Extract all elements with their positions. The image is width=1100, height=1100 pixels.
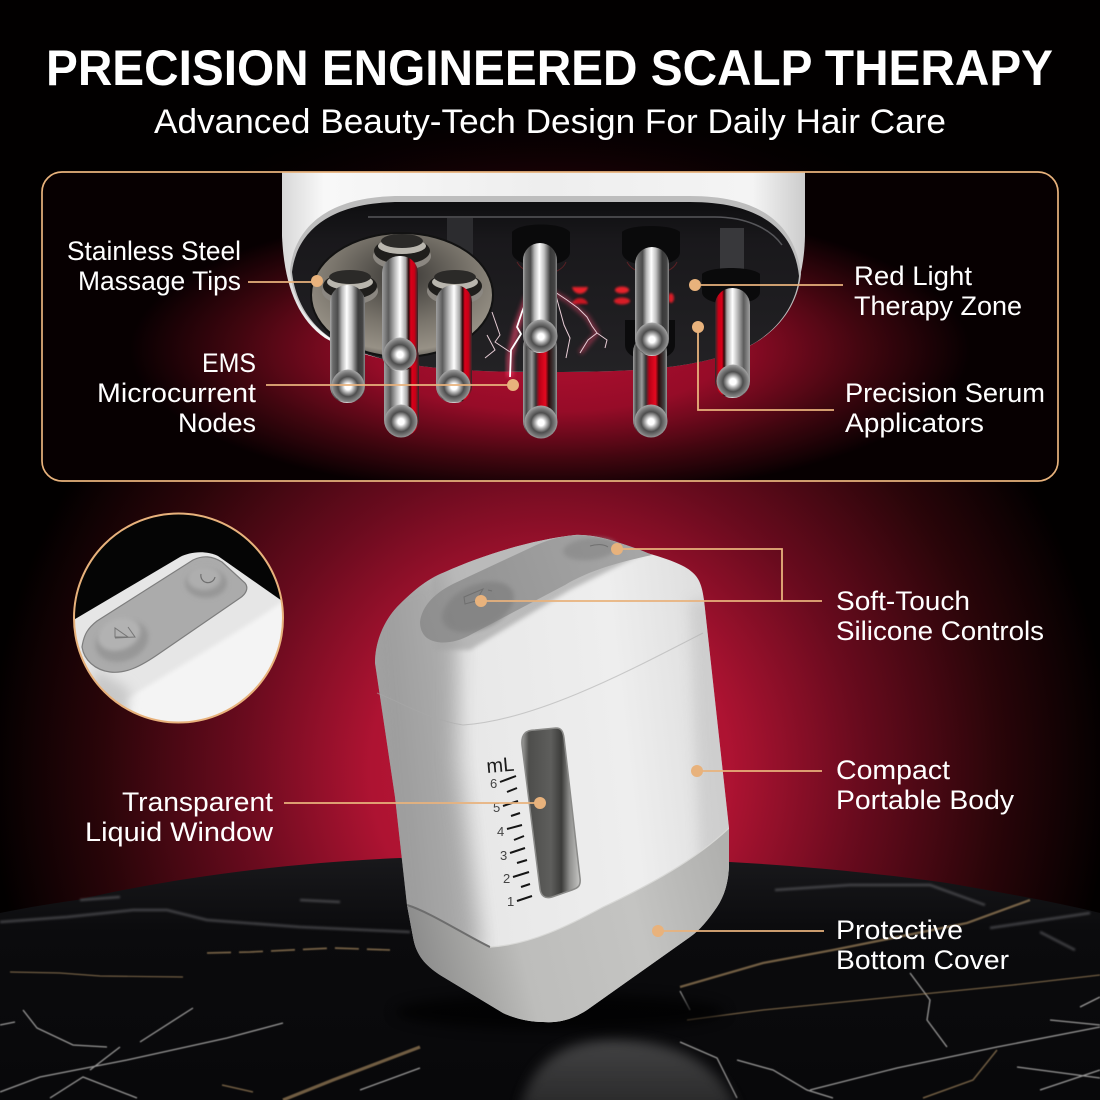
front pins: [322, 224, 760, 403]
label: red light therapy zone: Red Light: [854, 261, 972, 291]
subtitle: Advanced Beauty-Tech Design For Daily Hair Care: [154, 103, 946, 141]
label: compact portable body: Portable Body: [836, 785, 1015, 815]
volume scale: 1: [507, 894, 514, 909]
label: precision serum applicators: [845, 378, 1045, 438]
plate reflections: [447, 218, 473, 258]
inset device body: [75, 552, 282, 712]
body shell: [375, 535, 729, 1022]
silver disc: [311, 233, 493, 357]
volume scale: 4: [497, 824, 504, 839]
label: EMS microcurrent nodes: Nodes: [178, 408, 256, 438]
volume scale: [486, 754, 532, 909]
label: soft-touch silicone controls: [836, 586, 1044, 646]
power button: [562, 535, 618, 563]
label: protective bottom cover: [836, 915, 1009, 975]
red light spots: [572, 286, 674, 304]
label: compact portable body: Compact: [836, 755, 951, 785]
mode button: [434, 571, 522, 643]
label: precision serum applicators: Precision Serum: [845, 378, 1045, 408]
panel border: [42, 172, 1058, 481]
volume scale: 3: [500, 848, 507, 863]
soft grey veins: [0, 885, 1090, 950]
rear pins: [384, 320, 675, 438]
label: protective bottom cover: Protective: [836, 915, 963, 945]
device: portable body: [365, 525, 740, 1030]
body shading: [365, 565, 480, 950]
marble table: [0, 857, 1100, 1100]
inset circle: controls close-up: [70, 510, 290, 730]
volume scale: mL: [486, 754, 515, 778]
label: EMS microcurrent nodes: EMS: [202, 348, 256, 378]
label: soft-touch silicone controls: Silicone Controls: [836, 616, 1044, 646]
label: transparent liquid window: Liquid Window: [85, 817, 274, 847]
label: compact portable body: [836, 755, 1015, 815]
dark collars: [512, 224, 570, 266]
table reflection: [520, 1040, 737, 1100]
label: precision serum applicators: Applicators: [845, 408, 984, 438]
label: transparent liquid window: Transparent: [122, 787, 274, 817]
inset control plate: [82, 557, 247, 672]
label: EMS microcurrent nodes: Microcurrent: [97, 378, 257, 408]
lightning: EMS microcurrent: [485, 287, 607, 377]
shell seam: [377, 633, 703, 725]
panel: device head close-up: [42, 172, 1058, 481]
bottom cover: [400, 828, 729, 1030]
label: red light therapy zone: [854, 261, 1022, 321]
label: stainless steel massage tips: Massage Tips: [78, 266, 241, 296]
silver pin collars: [322, 277, 378, 305]
callout lines and dots: [248, 282, 843, 931]
device shadow: [395, 994, 725, 1030]
device head: [282, 172, 805, 372]
volume scale: 6: [490, 776, 497, 791]
label: red light therapy zone: Therapy Zone: [854, 291, 1022, 321]
label: EMS microcurrent nodes: [97, 348, 257, 438]
volume scale: 2: [503, 871, 510, 886]
mode icon: [464, 589, 492, 604]
label: transparent liquid window: [85, 787, 274, 847]
volume scale: 5: [493, 800, 500, 815]
liquid window: [522, 728, 580, 898]
power icon: [590, 545, 608, 547]
white veins: [0, 973, 1100, 1098]
label: soft-touch silicone controls: Soft-Touch: [836, 586, 970, 616]
control plate: [420, 535, 652, 643]
title: PRECISION ENGINEERED SCALP THERAPY: [46, 40, 1053, 96]
gold veins: [10, 900, 1100, 1100]
label: stainless steel massage tips: [67, 236, 241, 296]
label: protective bottom cover: Bottom Cover: [836, 945, 1009, 975]
label: stainless steel massage tips: Stainless Steel: [67, 236, 241, 266]
